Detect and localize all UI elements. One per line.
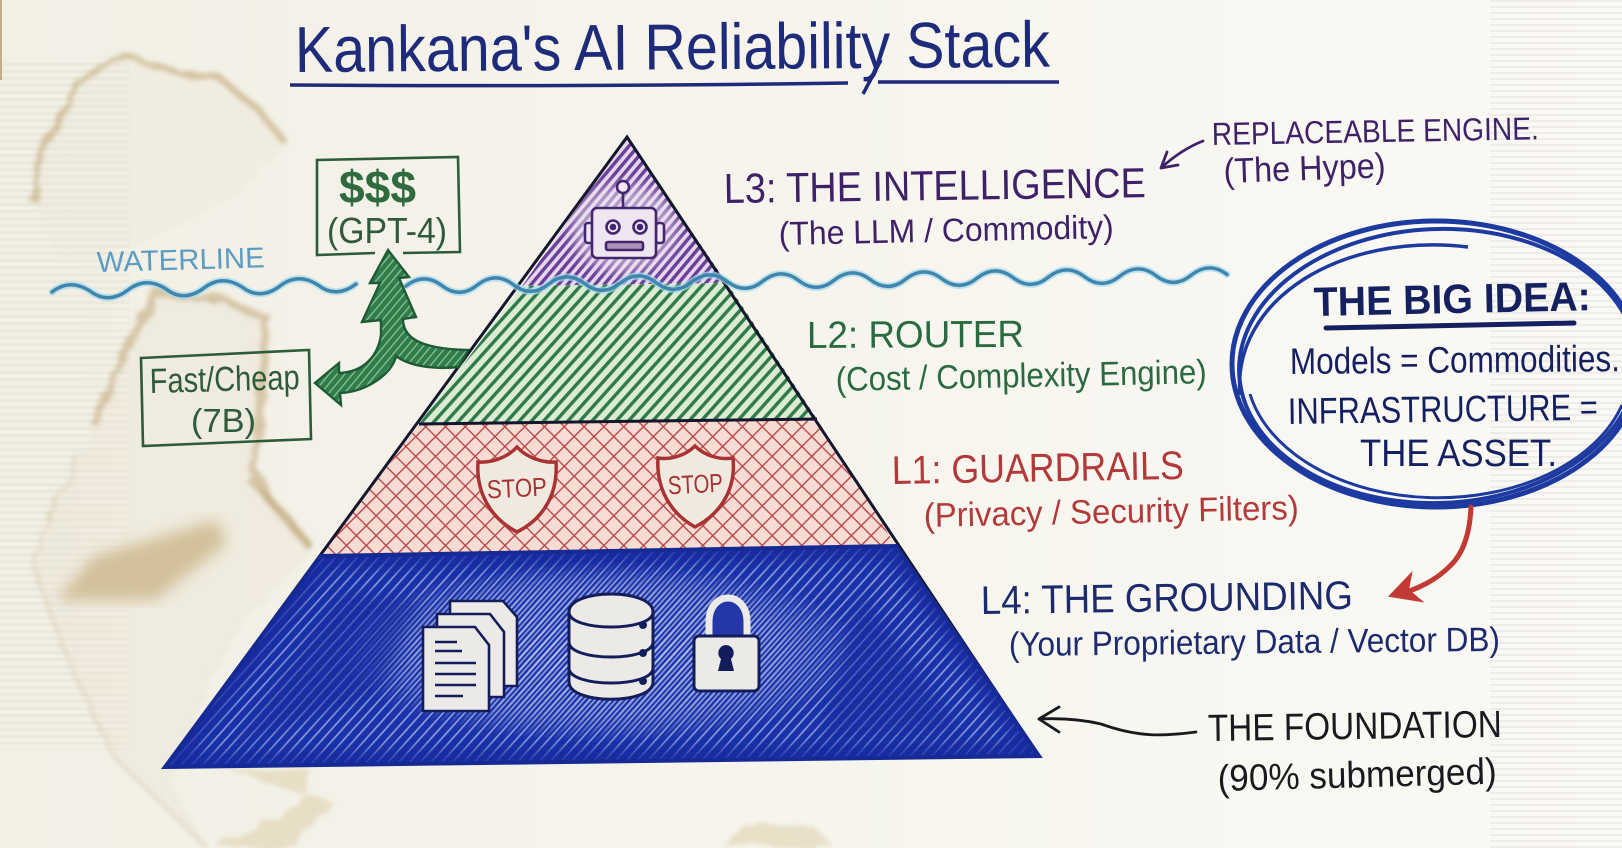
pyramid — [165, 137, 1039, 767]
hand-drawn circles — [1232, 221, 1622, 510]
box: fast and cheap route: Fast/Cheap — [149, 358, 300, 401]
box: GPT-4 expensive route — [317, 157, 460, 255]
label: L2 router — [807, 314, 1207, 399]
label: the foundation: (90% submerged) — [1217, 751, 1497, 799]
icon: stop shield left: STOP — [486, 471, 548, 505]
label: L3 intelligence: L3: THE INTELLIGENCE — [723, 159, 1146, 212]
icon: stop shield right — [658, 446, 733, 527]
layer L2: green router — [419, 283, 817, 424]
label: L1 guardrails: (Privacy / Security Filters) — [923, 489, 1299, 535]
callout: replaceable engine: (The Hype) — [1223, 146, 1386, 191]
label: L2 router: (Cost / Complexity Engine) — [835, 353, 1207, 399]
icon: stop shield left — [478, 447, 556, 532]
label: L4 grounding: (Your Proprietary Data / Vector DB) — [1009, 621, 1500, 664]
layer L4: blue grounding — [165, 546, 1039, 767]
box: fast and cheap route: (7B) — [191, 402, 256, 439]
layer L1: red guardrails — [321, 419, 896, 556]
waterline label: WATERLINE — [96, 242, 265, 279]
callout: replaceable engine: REPLACEABLE ENGINE. — [1211, 110, 1539, 152]
big idea heading: THE BIG IDEA: — [1313, 273, 1591, 325]
label: L3 intelligence: (The LLM / Commodity) — [778, 208, 1114, 252]
arrow: green router split — [315, 250, 468, 405]
label: the foundation: THE FOUNDATION — [1208, 704, 1502, 750]
big idea body: THE ASSET. — [1360, 433, 1557, 475]
icon: database — [569, 594, 653, 699]
label: L4 grounding: L4: THE GROUNDING — [981, 574, 1353, 623]
panel: the big idea — [1232, 221, 1622, 510]
icon: padlock — [694, 598, 759, 691]
label: L4 grounding — [981, 574, 1500, 664]
arrow: big idea to grounding — [1390, 507, 1471, 601]
icon: documents — [423, 601, 517, 711]
waterline — [52, 242, 1227, 298]
label: L3 intelligence — [723, 159, 1146, 252]
big idea body — [1288, 338, 1620, 475]
box: GPT-4 expensive route: $$$ — [339, 161, 416, 213]
label: L1 guardrails: L1: GUARDRAILS — [891, 444, 1184, 493]
box: GPT-4 expensive route: (GPT-4) — [327, 210, 447, 251]
pyramid outline — [165, 137, 1039, 767]
label: the foundation — [1039, 704, 1502, 799]
label: L2 router: L2: ROUTER — [807, 314, 1024, 357]
icon: stop shield right: STOP — [667, 468, 724, 500]
title: Kankana's AI Reliability Stack — [295, 8, 1051, 86]
label: L1 guardrails — [891, 444, 1299, 535]
callout: replaceable engine — [1161, 110, 1539, 191]
layer L3: purple intelligence — [522, 137, 727, 286]
icon: robot — [585, 181, 664, 258]
arrow: to foundation — [1039, 707, 1196, 735]
arrow: to intelligence — [1161, 141, 1203, 168]
box: fast and cheap route — [141, 350, 311, 446]
